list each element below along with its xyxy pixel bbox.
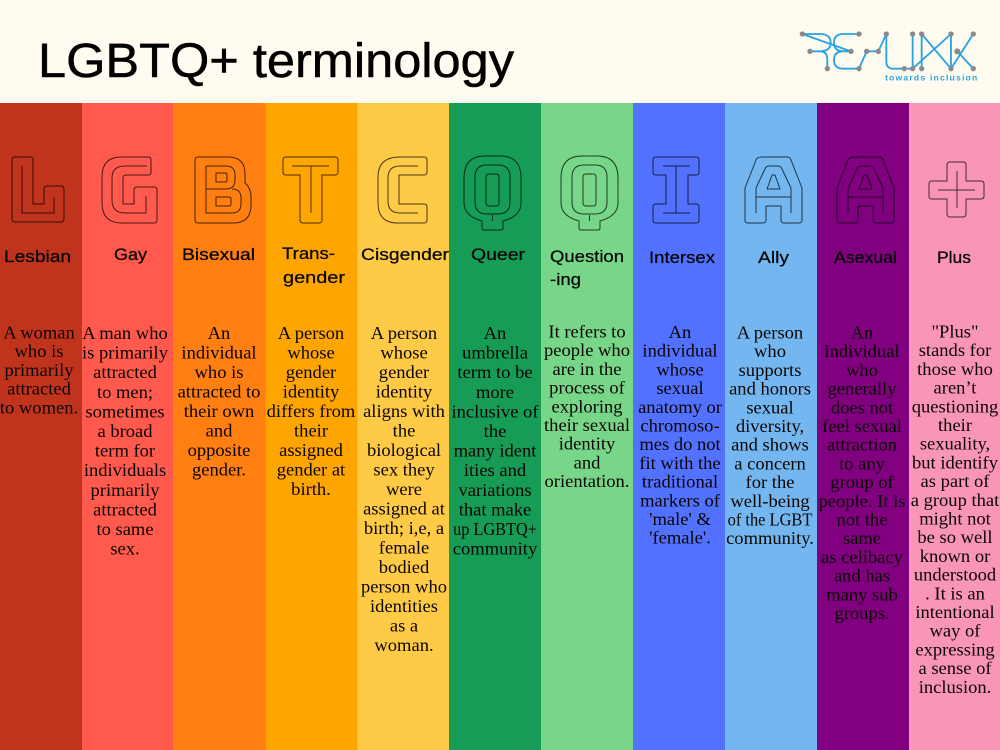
definition text: be so well — [917, 528, 993, 547]
definition text: stands for — [919, 341, 991, 360]
definition text: whose — [380, 343, 428, 362]
definition text: assigned — [279, 440, 343, 460]
definition text: markers of — [640, 491, 720, 510]
definition text: diversity, — [736, 416, 804, 436]
definition text: sometimes — [85, 402, 165, 421]
definition text: traditional — [642, 472, 718, 491]
definition text: ities and — [464, 461, 526, 480]
definition text: their sexual — [544, 415, 630, 435]
definition text: and — [574, 453, 600, 472]
heading: Questioning: Question — [550, 247, 624, 266]
definition text: attraction — [827, 435, 897, 455]
definition text: identity — [376, 382, 432, 401]
heading: Plus: Plus — [937, 248, 971, 267]
definition text: An — [669, 322, 691, 342]
definition text: expressing — [915, 640, 995, 659]
definition text: people. It is — [819, 491, 905, 511]
definition text: whose — [656, 360, 704, 379]
definition text: as celibacy — [821, 547, 903, 567]
panel: Plus — [909, 103, 1000, 750]
definition text: aren’t — [934, 378, 976, 397]
definition text: assigned at — [363, 499, 445, 518]
icon: letter G — [102, 157, 157, 223]
heading: Transgender: gender — [283, 268, 345, 287]
definition text: and shows — [731, 435, 809, 455]
definition text: to any — [839, 454, 885, 473]
icon: letter Q — [561, 156, 618, 230]
heading: Ally: Ally — [758, 248, 790, 267]
definition text: identity — [559, 434, 615, 454]
definition text: questioning — [912, 397, 998, 416]
definition text: attracted — [93, 500, 157, 519]
definition text: as part of — [921, 472, 989, 491]
definition text: attracted to — [178, 382, 260, 401]
definition text: An — [484, 323, 506, 343]
definition text: more — [476, 382, 514, 402]
icon: letter A — [745, 157, 802, 223]
panel: Cisgender — [358, 103, 449, 750]
definition text: sex. — [110, 539, 140, 558]
definition text: aligns with — [363, 401, 445, 421]
definition text: person who — [361, 577, 447, 596]
definition text: for the — [746, 473, 794, 492]
definition text: umbrella — [462, 343, 528, 362]
definition text: a broad — [97, 421, 153, 441]
definition text: identities — [370, 596, 438, 616]
heading: Bisexual: Bisexual — [182, 245, 255, 264]
definition text: groups. — [834, 603, 890, 623]
definition text: whose — [287, 343, 335, 362]
definition text: differs from — [267, 401, 355, 421]
logo: RE-LINK towards inclusion — [800, 31, 977, 83]
title: LGBTQ+ terminology — [38, 35, 514, 88]
panel: Questioning — [541, 103, 633, 750]
definition text: sexuality, — [920, 434, 990, 454]
definition text: were — [386, 479, 422, 499]
definition text: known or — [920, 546, 990, 566]
definition text: attracted — [7, 379, 71, 398]
definition text: orientation. — [545, 472, 629, 491]
definition text: intentional — [915, 602, 995, 622]
definition text: many ident — [454, 441, 536, 460]
icon: letter B — [195, 157, 251, 223]
definition text: group of — [830, 473, 894, 492]
definition text: a sense of — [918, 659, 992, 678]
definition text: and — [206, 421, 232, 440]
definition text: identity — [283, 382, 339, 401]
definition text: community. — [726, 529, 814, 548]
icon: letter A — [837, 157, 894, 223]
definition text: supports — [739, 360, 801, 380]
definition text: 'male' & — [649, 509, 711, 529]
definition text: female — [379, 538, 429, 557]
definition text: people who — [544, 341, 630, 360]
definition text: individual — [181, 343, 257, 362]
heading: Questioning: -ing — [550, 270, 581, 289]
definition text: An — [851, 323, 873, 342]
logo: RE-LINK towards inclusion: towards inclusion — [885, 73, 977, 83]
definition text: but identify — [912, 453, 998, 472]
definition text: A man who — [82, 323, 168, 343]
definition text: A woman — [3, 323, 75, 342]
definition text: gender — [379, 362, 429, 382]
definition text: to same — [96, 519, 154, 539]
definition text: as a — [390, 616, 418, 635]
definition text: sexual — [656, 379, 704, 398]
heading: Gay: Gay — [114, 245, 148, 264]
icon: plus sign — [929, 162, 984, 217]
definition text: It refers to — [548, 322, 626, 341]
definition text: the — [484, 421, 506, 441]
definition text: might not — [919, 509, 991, 528]
definition text: chromoso- — [640, 416, 720, 435]
definition text: A person — [278, 323, 344, 343]
definition text: gender at — [277, 460, 345, 479]
definition text: attracted — [93, 363, 157, 382]
definition text: variations — [458, 480, 532, 500]
definition text: who — [754, 342, 786, 361]
heading: Asexual: Asexual — [834, 248, 897, 267]
definition text: primarily — [5, 360, 73, 380]
definition text: their — [294, 421, 328, 440]
panel: Ally — [725, 103, 817, 750]
heading: Questioning — [550, 247, 624, 289]
definition text: birth; i,e, a — [364, 518, 444, 538]
definition text: inclusion. — [919, 677, 991, 697]
definition text: and honors — [729, 379, 811, 398]
panel: Lesbian — [0, 103, 82, 750]
definition text: a group that — [911, 490, 999, 510]
definition text: sex they — [373, 460, 435, 479]
definition text: up LGBTQ+ — [453, 519, 537, 539]
icon: letter C — [378, 157, 427, 223]
definition text: bodied — [379, 557, 429, 577]
header band — [0, 0, 1000, 103]
definition text: woman. — [374, 635, 434, 655]
definition text: and has — [834, 566, 890, 585]
heading: Queer: Queer — [471, 245, 525, 264]
definition text: same — [843, 529, 881, 548]
definition text: individual — [642, 341, 718, 361]
definition text: way of — [930, 621, 980, 641]
definition text: gender. — [192, 460, 246, 479]
definition text: of the LGBT — [728, 510, 812, 529]
panel: Transgender — [266, 103, 358, 750]
icon: letter L — [12, 157, 64, 222]
definition text: the — [393, 421, 415, 440]
definition text: who — [846, 360, 878, 380]
panel: Gay — [82, 103, 173, 750]
definition text: their own — [184, 401, 254, 421]
definition text: a concern — [734, 454, 806, 473]
definition text: generally — [828, 379, 896, 398]
definition text: those who — [917, 359, 993, 379]
definition text: process of — [549, 378, 625, 397]
definition text: their — [938, 415, 972, 435]
heading: Transgender — [282, 244, 345, 287]
definition text: "Plus" — [931, 322, 979, 341]
definition text: well-being — [730, 491, 810, 511]
definition text: mes do not — [639, 435, 721, 454]
definition text: 'female'. — [649, 528, 711, 548]
definition text: sexual — [746, 398, 794, 417]
definition text: feel sexual — [822, 416, 902, 436]
definition text: are in the — [553, 359, 621, 379]
definition text: inclusive of — [452, 402, 538, 421]
definition text: is primarily — [82, 343, 168, 362]
definition text: An — [208, 323, 230, 343]
definition text: term to be — [457, 363, 533, 382]
definition text: exploring — [551, 397, 623, 416]
definition text: individual — [824, 342, 900, 361]
definition text: to men; — [97, 382, 153, 402]
definition text: birth. — [291, 479, 331, 499]
definition text: biological — [367, 440, 441, 460]
definition text: many sub — [826, 585, 898, 604]
definition text: who is — [195, 362, 243, 382]
definition text: fit with the — [639, 453, 721, 473]
panel: Intersex — [633, 103, 725, 750]
definition text: A person — [371, 323, 437, 343]
definition text: opposite — [188, 440, 250, 460]
definition text: . It is an — [925, 584, 985, 603]
definition text: that make — [459, 500, 531, 519]
heading: Cisgender: Cisgender — [361, 245, 449, 264]
definition text: gender — [286, 362, 336, 382]
icon: letter Q — [464, 156, 521, 230]
definition text: term for — [95, 441, 155, 460]
heading: Transgender: Trans- — [282, 244, 335, 263]
heading: Intersex: Intersex — [649, 248, 716, 267]
definition text: A person — [737, 323, 803, 342]
definition text: community — [453, 539, 537, 558]
definition text: to women. — [0, 398, 78, 417]
panel: Queer — [449, 103, 541, 750]
definition text: primarily — [91, 480, 159, 500]
heading: Lesbian: Lesbian — [4, 247, 71, 266]
icon: letter T — [283, 157, 338, 223]
panel: Bisexual — [173, 103, 266, 750]
definition text: anatomy or — [638, 397, 722, 417]
icon: letter I — [653, 157, 699, 223]
definition text: does not — [831, 398, 893, 417]
definition text: individuals — [84, 461, 166, 480]
panel: Asexual — [817, 103, 909, 750]
definition text: understood — [914, 565, 996, 584]
definition text: who is — [15, 342, 63, 361]
definition text: not the — [837, 510, 887, 529]
